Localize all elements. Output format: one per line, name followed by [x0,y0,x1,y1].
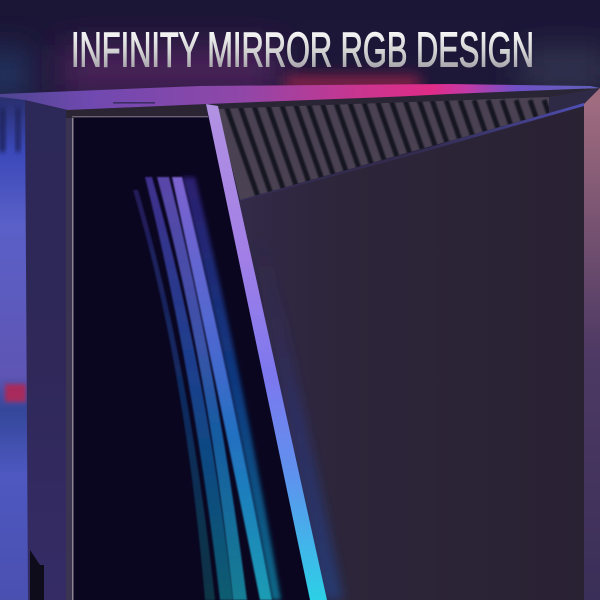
rgb light bar [206,104,327,600]
vent slats [218,97,549,200]
reflection stripe 2 [157,177,247,600]
left blurred background strip [0,94,30,600]
infinity mirror reflections [133,177,281,600]
reflection stripe 3 [145,177,233,600]
vent lower edge highlight [240,103,584,201]
case left side panel [25,100,68,600]
dark mirror window [74,118,312,600]
right side panel strip [584,88,600,600]
bottom-left notch [30,550,44,600]
top face slot [113,102,155,104]
reflection stripe 1 [172,177,272,600]
reflection stripe 4 [133,190,215,600]
glow on door beside bar [250,230,344,600]
door panel [226,104,584,600]
reflection glow band [182,177,281,600]
top face of case [0,84,600,110]
door frame [66,104,208,600]
dark area right of vents [440,88,600,145]
dark strip under top edge [207,88,600,109]
